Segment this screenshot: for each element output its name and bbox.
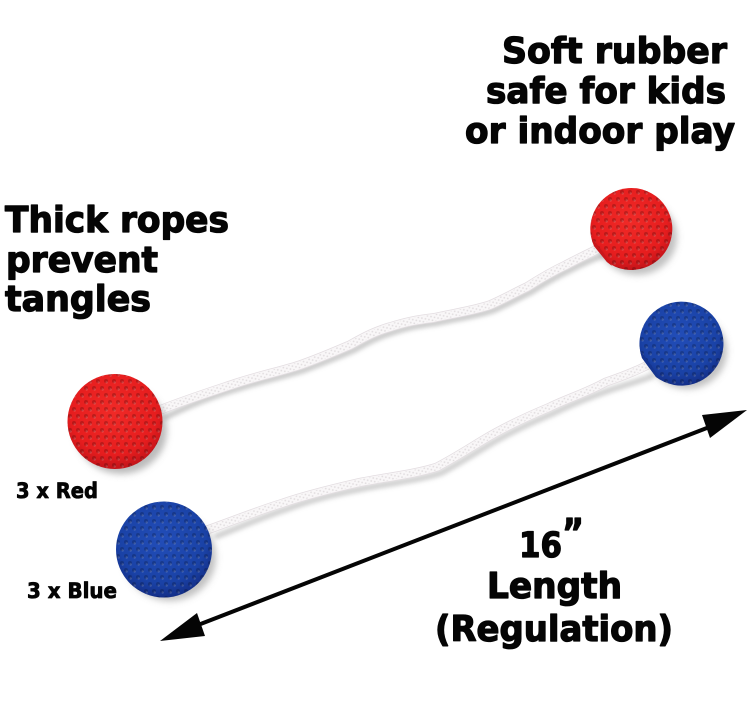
blue rope — [207, 365, 652, 536]
heading: soft rubber — [465, 31, 735, 152]
large red ball — [68, 374, 167, 474]
heading: soft rubber: safe for kids — [486, 71, 726, 112]
small red ball — [590, 188, 677, 275]
heading: thick ropes: prevent — [6, 240, 158, 281]
label: 3 x red: 3 x Red — [16, 479, 98, 503]
length label: 16 — [519, 526, 562, 566]
double-headed length arrow — [160, 410, 747, 641]
heading: thick ropes — [5, 200, 229, 320]
heading: thick ropes: Thick ropes — [5, 200, 229, 241]
length label: (Regulation) — [435, 609, 673, 650]
large blue ball — [116, 502, 216, 601]
label: 3 x blue: 3 x Blue — [27, 579, 117, 603]
heading: soft rubber: or indoor play — [465, 111, 735, 152]
red rope — [160, 247, 606, 417]
heading: thick ropes: tangles — [5, 279, 151, 320]
length label — [435, 511, 673, 650]
length label: Length — [487, 566, 622, 607]
length label: ” — [562, 511, 584, 555]
small blue ball — [639, 302, 727, 389]
heading: soft rubber: Soft rubber — [502, 31, 727, 72]
